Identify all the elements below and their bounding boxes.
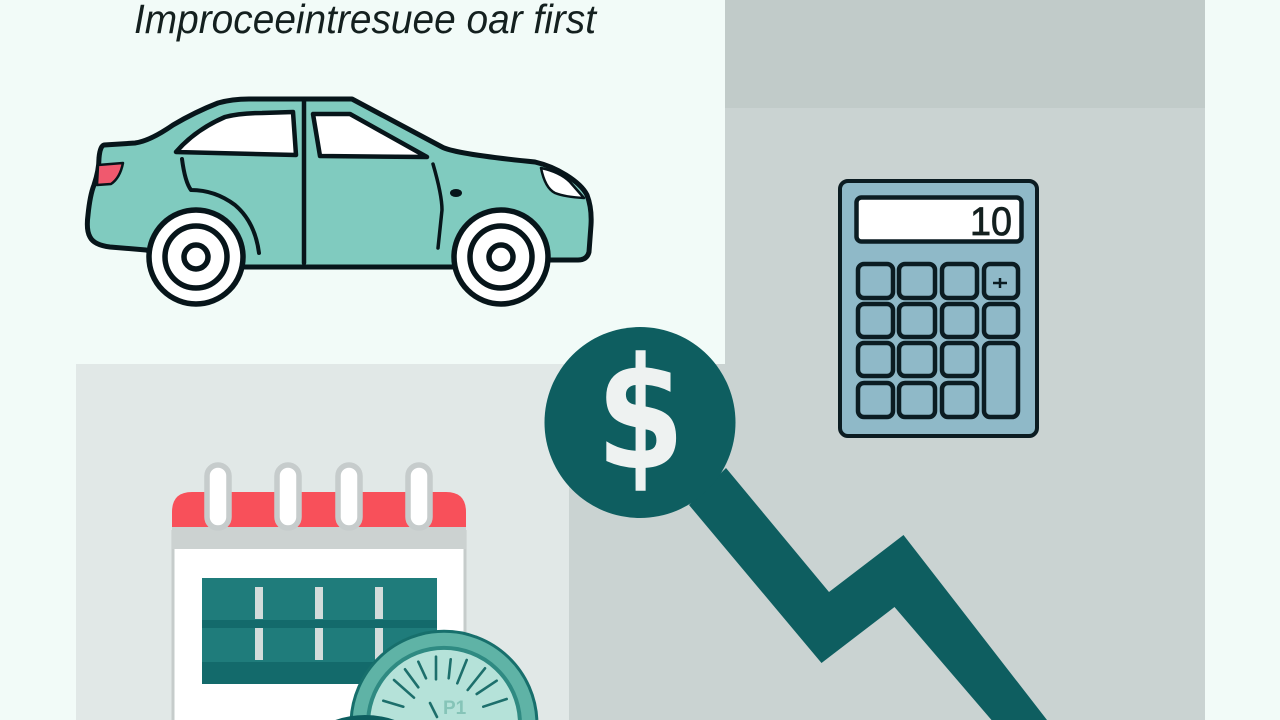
calendar red header	[172, 492, 466, 527]
icon: second coin	[335, 715, 395, 720]
rear wheel	[149, 210, 243, 304]
panel: right grey background	[569, 0, 1205, 720]
coin mark: P1	[443, 698, 467, 719]
icon: dollar badge	[544, 325, 736, 518]
car body	[87, 99, 591, 267]
icon: car	[87, 99, 591, 304]
calculator display value: 10	[970, 200, 1012, 244]
icon: calculator	[840, 181, 1037, 436]
calculator screen	[856, 198, 1022, 242]
rear window	[176, 112, 296, 155]
chart: falling price line	[689, 468, 1047, 720]
calendar grey band	[172, 527, 466, 549]
calendar binding rings	[207, 465, 430, 528]
door handle	[450, 189, 462, 197]
front window	[313, 114, 427, 157]
front wheel	[454, 210, 548, 304]
calendar grid	[202, 578, 437, 684]
calculator body	[840, 181, 1037, 436]
door line	[433, 164, 442, 248]
panel: lower left background	[76, 364, 569, 720]
dollar sign: $	[596, 325, 685, 505]
calendar page	[173, 530, 465, 720]
calculator keys	[858, 264, 1018, 417]
icon: calendar	[172, 465, 466, 720]
headlight	[541, 168, 584, 198]
plus sign	[993, 278, 1007, 288]
icon: coin	[351, 631, 537, 720]
tail light	[97, 163, 123, 185]
rear wheel arch line	[182, 159, 259, 253]
door pillar	[302, 100, 306, 263]
coin ticks	[383, 657, 507, 717]
